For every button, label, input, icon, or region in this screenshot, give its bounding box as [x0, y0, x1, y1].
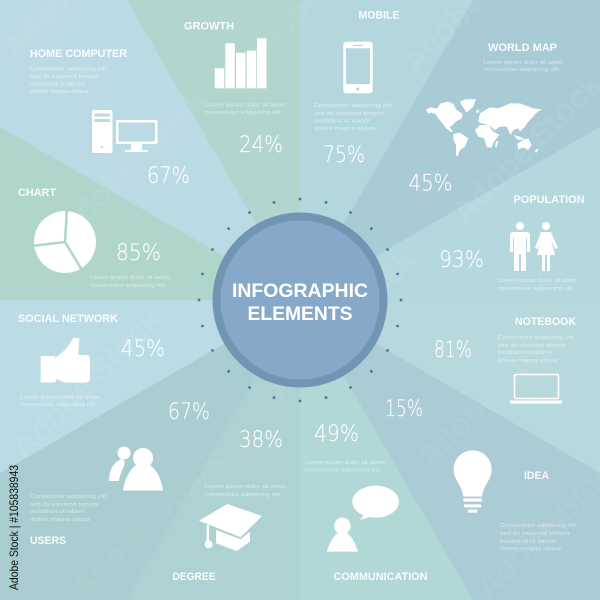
description	[90, 275, 172, 289]
description: Consectetur adipiscing elit,	[30, 66, 109, 72]
stock watermarks: Adobe Stock	[409, 311, 573, 475]
panel: mobile: 75%	[323, 143, 365, 168]
description: Consectetur adipiscing elit,	[30, 494, 109, 500]
description: Consectetur adipiscing elit,	[314, 103, 394, 109]
description: consectetur adipiscing elit.	[20, 402, 98, 408]
panel: growth: 24%	[239, 133, 283, 158]
panel: home computer	[30, 48, 190, 189]
dotted ring	[198, 198, 402, 402]
icon: light bulb	[454, 450, 492, 513]
icon: graduation cap	[199, 504, 262, 551]
panel: degree: DEGREE	[172, 571, 216, 583]
description	[314, 103, 394, 132]
description: Lorem ipsum dolor sit amet,	[305, 460, 387, 466]
description: sed do eiusmod tempor	[30, 74, 99, 80]
icon: man and woman	[510, 222, 558, 271]
description: incididunt ut labore	[498, 350, 552, 356]
description	[20, 395, 102, 408]
icon: users	[109, 446, 163, 490]
panel: users	[30, 400, 210, 547]
description: consectetur adipiscing elit.	[498, 286, 575, 292]
description: Lorem ipsum dolor sit amet,	[20, 395, 102, 401]
panel: communication: 49%	[314, 422, 359, 447]
description: Lorem ipsum dolor sit amet,	[205, 102, 288, 108]
panel: degree: 38%	[239, 428, 283, 453]
description: consectetur adipiscing elit.	[305, 468, 383, 474]
description: consectetur adipiscing elit.	[205, 110, 283, 116]
description: sed do eiusmod tempor	[498, 343, 567, 349]
description: sed do eiusmod tempor	[314, 111, 384, 117]
panel: idea: IDEA	[524, 470, 549, 482]
panel: world map: 45%	[408, 172, 452, 196]
panel: chart: CHART	[18, 187, 56, 199]
description	[498, 278, 579, 292]
panel: mobile: MOBILE	[358, 10, 400, 22]
panel: notebook: 81%	[434, 338, 472, 363]
stock watermarks: Adobe Stock	[49, 81, 213, 245]
icon: bar chart	[215, 38, 266, 88]
description: incididunt ut labore	[30, 82, 85, 88]
icon: smartphone	[343, 42, 373, 93]
panel: degree	[172, 428, 288, 583]
panel: idea	[385, 397, 579, 552]
description	[500, 523, 579, 552]
panel: notebook	[434, 316, 576, 404]
description	[30, 494, 109, 523]
description	[498, 335, 576, 364]
description: sed do eiusmod tempor	[500, 531, 570, 537]
description: incididunt ut labore	[314, 118, 370, 124]
centre title	[232, 280, 368, 325]
stock id label: Adobe Stock | #105838943	[7, 465, 21, 590]
description: dolore magna aliqua	[498, 358, 559, 364]
panel: growth	[184, 20, 288, 158]
description: Lorem ipsum dolor sit amet,	[498, 278, 579, 284]
description: incididunt ut labore	[500, 539, 556, 545]
icon: world map	[426, 99, 542, 157]
description: Lorem ipsum dolor sit amet,	[205, 484, 288, 490]
panel: communication	[305, 422, 428, 583]
centre circle with title	[212, 212, 388, 388]
panel: social network: SOCIAL NETWORK	[18, 313, 118, 325]
panel: home computer: HOME COMPUTER	[30, 48, 127, 60]
description: dolore magna aliqua.	[30, 89, 91, 95]
description	[30, 66, 109, 95]
description: consectetur adipiscing elit.	[484, 67, 561, 73]
stock watermarks: Adobe Stock	[259, 241, 423, 405]
panel: social network	[18, 313, 165, 408]
description: Consectetur adipiscing elit,	[498, 335, 576, 341]
description: Lorem ipsum dolor sit amet,	[90, 275, 172, 281]
panel: population: 93%	[439, 248, 484, 273]
description: dolore magna aliqua	[30, 517, 91, 523]
centre title: ELEMENTS	[248, 303, 352, 325]
icon: laptop	[510, 374, 562, 404]
description: sed do eiusmod tempor	[30, 502, 99, 508]
panel: population	[439, 194, 585, 292]
panel: idea: 15%	[385, 397, 423, 422]
panel: chart: 85%	[116, 241, 161, 266]
icon: thumbs up	[41, 338, 90, 383]
panel: growth: GROWTH	[184, 20, 234, 32]
panel: mobile	[314, 10, 400, 168]
description: dolore magna aliqua	[500, 546, 562, 552]
panel: social network: 45%	[121, 337, 165, 362]
description	[305, 460, 387, 474]
panel: notebook: NOTEBOOK	[515, 316, 576, 328]
panel: world map	[408, 42, 565, 196]
description	[205, 484, 288, 498]
description: consectetur adipiscing elit.	[205, 492, 283, 498]
panel: chart	[18, 187, 172, 289]
description: incididunt ut labore	[30, 509, 85, 515]
panel: users: USERS	[30, 535, 66, 547]
stock watermarks: Adobe Stock	[4, 301, 168, 465]
icon: desktop computer	[92, 110, 158, 153]
description: Consectetur adipiscing elit,	[500, 523, 579, 529]
icon: pie chart	[32, 208, 96, 273]
panel: users: 67%	[168, 400, 210, 425]
panel: home computer: 67%	[147, 164, 190, 189]
description: consectetur adipiscing elit.	[90, 283, 168, 289]
description: dolore magna aliqua	[314, 126, 376, 132]
icon: person with speech bubble	[327, 486, 399, 552]
description	[205, 102, 288, 116]
panel: world map: WORLD MAP	[488, 42, 557, 54]
centre title: INFOGRAPHIC	[232, 280, 368, 302]
panel: communication: COMMUNICATION	[334, 571, 428, 583]
description	[484, 60, 565, 73]
panel: population: POPULATION	[514, 194, 585, 206]
description: Lorem ipsum dolor sit amet,	[484, 60, 565, 66]
